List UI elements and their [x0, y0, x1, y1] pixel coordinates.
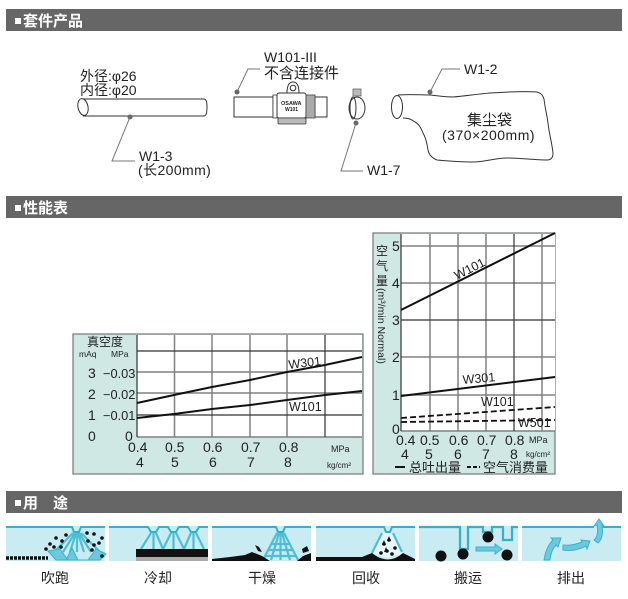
clamp W1-7	[341, 89, 401, 178]
pipe W1-3: (长200mm)	[138, 162, 211, 178]
chart: vacuum: −0.01	[103, 408, 135, 423]
chart: air volume: 2	[392, 349, 400, 365]
icon: drying	[212, 526, 311, 561]
chart: air volume: W101	[452, 255, 487, 283]
chart: air volume: 空	[376, 244, 388, 258]
chart: vacuum: W301	[288, 354, 322, 372]
icon: conveying	[419, 526, 518, 562]
label: applications: 干燥	[248, 570, 276, 586]
chart: vacuum: kg/cm²	[327, 461, 351, 470]
chart: air volume: MPa	[529, 435, 548, 445]
chart: air volume: W101	[481, 395, 514, 409]
chart: vacuum: −0.02	[103, 387, 135, 402]
heading: kit products	[6, 9, 622, 31]
label: applications: 回收	[352, 570, 380, 586]
curve W301	[137, 357, 362, 403]
chart: air volume: 空气消费量	[483, 460, 548, 475]
chart: air volume	[373, 233, 555, 475]
chart: air volume: 0.8	[505, 432, 525, 448]
icon: cooling	[109, 526, 208, 561]
chart: air volume: kg/cm²	[526, 450, 550, 459]
heading: applications: 用	[23, 495, 38, 512]
chart: vacuum: 8	[284, 454, 292, 470]
curve W101	[401, 233, 555, 310]
dust bag W1-2: (370×200mm)	[442, 127, 535, 143]
chart: vacuum: MPa	[111, 349, 129, 359]
chart: vacuum: 2	[88, 386, 96, 402]
chart: vacuum: 1	[88, 407, 96, 423]
clamp W1-7: W1-7	[367, 162, 401, 178]
heading: applications	[6, 491, 622, 513]
chart: air volume: 0.7	[477, 432, 497, 448]
ejector W101-III: W101-III	[264, 49, 317, 65]
curve W101	[137, 391, 362, 418]
chart: air volume: 4	[392, 275, 400, 291]
chart: air volume: 1	[392, 387, 400, 403]
ejector W101-III: 不含连接件	[264, 65, 339, 82]
icon: recovery	[316, 526, 415, 561]
chart: vacuum: 0.4	[128, 439, 148, 455]
dust bag W1-2	[392, 61, 553, 162]
chart: vacuum: 4	[136, 454, 144, 470]
chart: vacuum: 0.5	[165, 439, 185, 455]
chart: air volume: 5	[392, 238, 400, 254]
dashed curve W301	[401, 420, 555, 422]
heading: applications: 途	[53, 494, 68, 512]
heading: performance table	[6, 196, 622, 218]
chart: vacuum: 3	[88, 365, 96, 381]
dust bag W1-2: W1-2	[464, 61, 498, 77]
chart: vacuum: 6	[209, 454, 217, 470]
chart: air volume: 0.4	[396, 432, 416, 448]
chart: vacuum: 0.7	[241, 439, 261, 455]
chart: air volume: (m³/min Normal)	[375, 288, 387, 364]
chart: vacuum: 0.6	[203, 439, 223, 455]
chart: air volume: 3	[392, 312, 400, 328]
chart: vacuum: 0	[125, 428, 133, 444]
chart: vacuum: mAq	[79, 349, 97, 359]
chart: air volume: 气	[376, 258, 388, 273]
chart: air volume: W501	[518, 416, 551, 430]
heading: kit products: 套件产品	[23, 13, 83, 30]
chart: vacuum: 5	[171, 454, 179, 470]
chart: vacuum: 真空度	[87, 334, 123, 349]
dust bag W1-2: 集尘袋	[467, 112, 512, 129]
ejector W101-III: W101	[285, 107, 298, 113]
icon: exhaust	[522, 519, 621, 561]
chart: air volume: 0	[392, 421, 400, 437]
pipe W1-3: 内径:φ20	[80, 82, 137, 98]
label: applications	[41, 570, 585, 586]
ejector W101-III: OSAWA	[281, 101, 302, 107]
dashed curve W101	[401, 407, 555, 418]
chart: vacuum: 0.8	[279, 439, 299, 455]
chart: vacuum: MPa	[331, 444, 350, 454]
icon: blowing	[6, 526, 106, 561]
curve W301	[401, 377, 555, 396]
label: applications: 吹跑	[41, 570, 69, 586]
chart: air volume: 4	[401, 446, 409, 462]
pipe W1-3	[76, 68, 211, 178]
chart: air volume: 6	[454, 446, 462, 462]
chart: vacuum: 0	[88, 428, 96, 444]
chart: vacuum: 7	[247, 454, 255, 470]
chart: air volume: 0.5	[420, 432, 440, 448]
pipe W1-3: W1-3	[139, 148, 173, 164]
pipe W1-3: 外径:φ26	[80, 68, 137, 84]
chart: air volume: 8	[510, 446, 518, 462]
heading: performance table: 性能表	[23, 199, 68, 217]
chart: air volume: 5	[425, 446, 433, 462]
chart: air volume: W301	[462, 370, 496, 387]
chart: air volume: 0.6	[449, 432, 469, 448]
chart: vacuum: −0.03	[103, 366, 135, 381]
chart: vacuum: W101	[289, 400, 322, 414]
label: applications: 搬运	[454, 570, 482, 586]
ejector W101-III	[234, 49, 339, 124]
chart: air volume: 7	[482, 446, 490, 462]
chart: air volume: 总吐出量	[409, 460, 461, 475]
chart: air volume: 量	[376, 274, 388, 288]
label: applications: 排出	[557, 570, 585, 586]
chart: vacuum	[73, 334, 363, 474]
label: applications: 冷却	[144, 570, 172, 586]
